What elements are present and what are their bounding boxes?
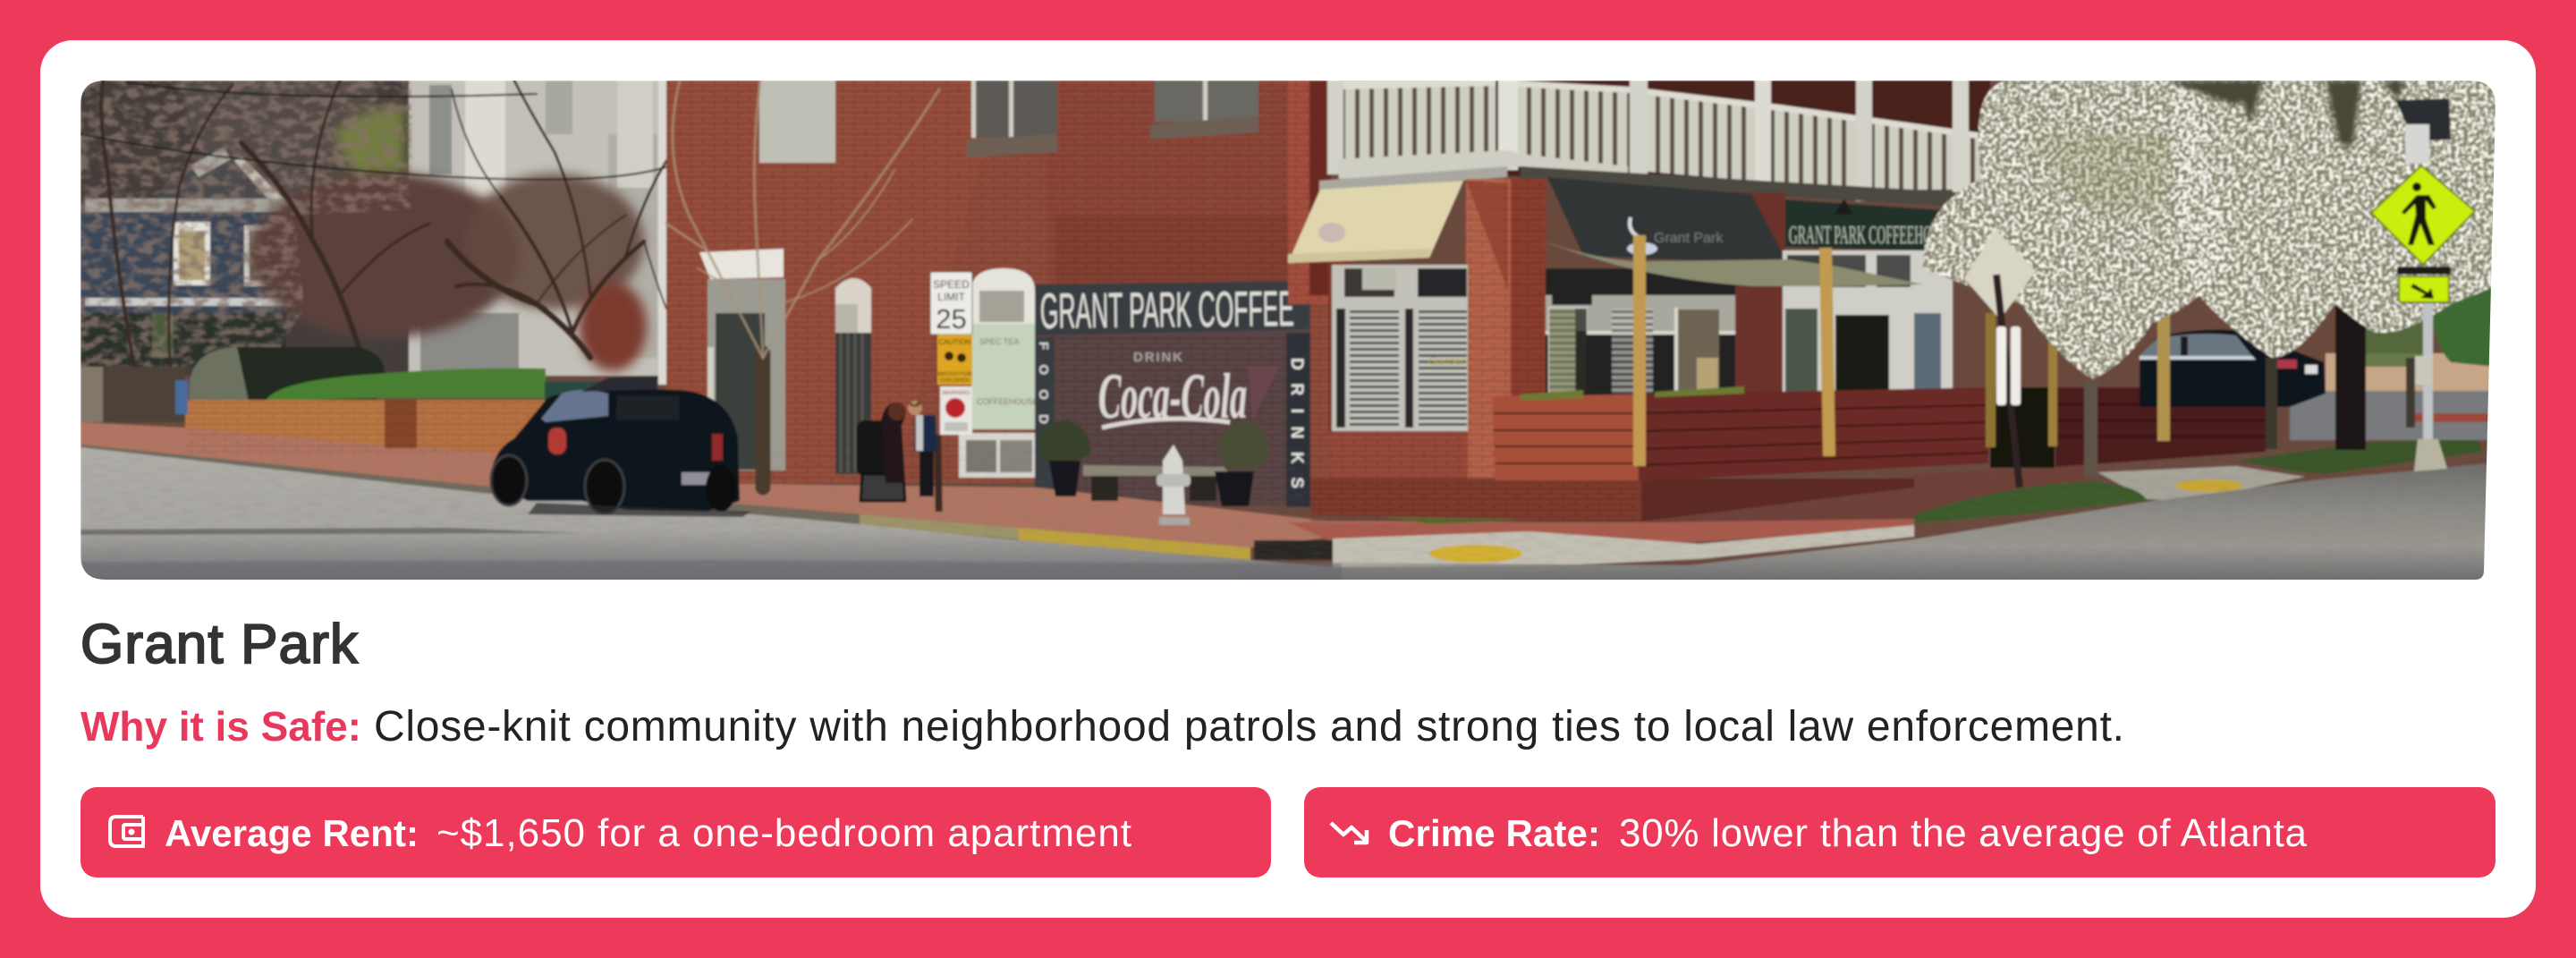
cafe brick facade [1310,179,1914,521]
road signs: speed limit 25: CAUTION [939,338,971,346]
parked dark car [491,376,751,517]
value: crime: 30% lower than the average of Atlanta [1619,811,2308,855]
label: crime rate: Crime Rate: [1388,812,1600,854]
planters and bench [1038,420,1268,506]
trees and house at left [80,81,411,376]
heading: Grant Park: Grant Park [80,614,359,675]
dark cafe awning: Grant Park [1654,231,1724,246]
road signs: speed limit 25: CHILDREN [940,377,970,384]
wooden patio planter fence [1492,386,2266,481]
painted mural: Grant Park Coffee / Coca-Cola: Coca-Cola [1098,360,1247,432]
flowering white trees [1923,81,2496,379]
curb ramps and grass [1333,438,2482,567]
icon: trending down arrow [1331,823,1367,843]
photo: Grant Park street corner [80,79,2496,581]
cafe left window with blinds: Garden [1428,354,1467,368]
ground-level doors and windows: SPEC TEA [979,337,1019,346]
foliage and bare trees [80,81,671,371]
cafe balcony [1288,79,2004,304]
road signs: speed limit 25 [930,272,972,512]
diamond sign seen from behind [1964,229,2036,487]
background wall, bush and street at right [2288,288,2491,442]
white building [409,81,666,385]
road signs: speed limit 25: 25 [936,303,967,335]
cafe right windows and sign [1783,199,1958,394]
ground-level doors and windows [699,249,1038,478]
garden wall, hedge, fence [80,347,617,456]
red brick building [666,81,1328,483]
road surface [80,447,2496,581]
photo: Grant Park street corner: GRANT PARK COFFEEHOUSE [1789,222,1955,250]
fire hydrant [1157,445,1191,525]
road signs: speed limit 25: WARNING [942,390,970,396]
ground-level doors and windows: COFFEEHOUSE [977,397,1038,406]
stat pill: crime rate [1304,787,2496,877]
sidewalk street tree [666,81,939,487]
road signs: speed limit 25: WATCH FOR [937,371,972,377]
sidewalk and curb [80,422,2093,560]
roadside notice sign [2415,356,2433,385]
parked dark sedan behind patio [2138,315,2326,443]
painted mural: Grant Park Coffee / Coca-Cola: GRANT PARK COFFEE [1039,280,1294,339]
painted mural: Grant Park Coffee / Coca-Cola: DRINK [1133,350,1182,365]
text block: why it is safe: Close-knit community with neighborhood patrols and strong ties to local law enforcement. [374,703,2124,750]
cream awning [1288,181,1463,263]
canvas shade sail [1551,243,1921,288]
label: average rent: Average Rent: [165,812,419,854]
stat pill: average rent [80,787,1271,877]
pedestrian crossing sign with arrow [2371,98,2475,471]
timber posts [1633,235,2057,466]
trunks and utility pole [2084,275,2415,478]
family with stroller [857,401,937,501]
road signs: speed limit 25: LIMIT [937,291,966,303]
painted mural: Grant Park Coffee / Coca-Cola: DRINKS [1287,358,1306,488]
dark cafe awning [1547,177,1789,265]
text block: why it is safe: Why it is Safe: [80,703,361,750]
cafe centre windows [1546,268,1735,395]
painted mural: Grant Park Coffee / Coca-Cola: FOOD [1036,342,1051,424]
icon: wallet [110,817,143,846]
cafe left window with blinds [1332,265,1468,431]
painted mural: Grant Park Coffee / Coca-Cola [1035,280,1310,508]
road signs: speed limit 25: SPEED [933,278,970,291]
value: rent: ~$1,650 for a one-bedroom apartment [436,811,1131,855]
